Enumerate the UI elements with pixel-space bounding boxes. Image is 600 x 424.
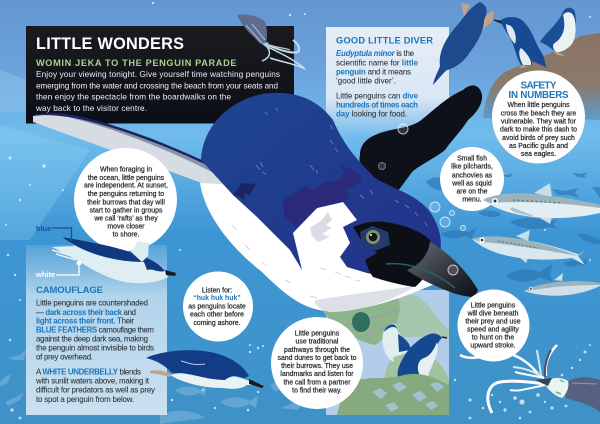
fish 1 [483,183,600,224]
belly feather marks [232,225,360,298]
circle: listen for: “huk huk huk” [193,295,241,302]
icon: fish group [472,183,600,296]
penguin: countershading diagram [52,237,176,283]
panel: camouflage [26,245,167,415]
label: white: white [35,270,55,279]
text: scientific name: Eudyptula minor is the [336,49,415,58]
icon: squid top [237,14,305,69]
intro text: Enjoy your viewing tonight. Give yourself time watching penguins [36,70,280,79]
text: scientific name: penguin and it means [336,68,411,76]
text: countershading: Little penguins are countershaded [36,299,148,308]
text: countershading: against the deep dark sea, making [36,335,148,344]
bubbles [378,124,466,275]
icon: diving penguin [433,2,494,85]
dark flank pattern [283,166,362,228]
text: dive hundreds: day looking for food. [336,110,407,119]
circle: listen for: each other before [190,312,244,319]
intro text: then enjoy the spectacle from the boardwalks on the [36,92,231,102]
circle: foraging: the penguins returning to [88,191,164,198]
circle: listen for: coming ashore. [193,320,241,327]
circle: safety in numbers: IN NUMBERS [508,90,569,101]
background fish silhouettes [426,172,600,282]
circle: dive beneath: will dive beneath [467,311,519,318]
circle: traditional pathways: use traditional [296,339,339,346]
text: white underbelly: with sunlit waters above, making it [35,377,150,386]
label: blue: blue [36,224,51,233]
intro text [35,70,280,113]
icon: penguins on rock [494,8,576,68]
black head mask [353,222,432,287]
circle: safety in numbers: avoid birds of prey such [502,135,575,142]
circle: traditional pathways: Little penguins [295,331,340,338]
penguin back [540,8,576,56]
circle: foraging: we call ‘rafts’ as they [93,215,158,222]
nest burrow [322,292,400,345]
circle: small fish [440,147,504,211]
text: scientific name: scientific name for little [336,58,419,68]
circle: traditional pathways [271,317,363,409]
circle: small fish: well as squid [451,181,492,188]
circle: small fish: anchovies as [452,172,493,179]
circle: safety in numbers: sea eagles. [521,151,556,158]
eye [360,226,390,251]
beak [407,242,478,297]
heading: little wonders: LITTLE WONDERS [36,35,184,53]
text: countershading: — dark across their back and [36,308,136,317]
circle: dive beneath: upward stroke. [470,343,516,350]
subheading: womin jeka: WOMIN JEKA TO THE PENGUIN PARADE [36,58,236,68]
circle: safety in numbers: When little penguins [507,102,570,109]
circle: safety in numbers [492,70,585,164]
panel: burrow scene [322,290,449,415]
circle: safety in numbers: as Pacific gulls and [509,143,568,150]
text: white underbelly [35,368,155,404]
left flipper [33,113,245,196]
right flipper [359,85,482,202]
text: dive hundreds: Little penguins can dive [336,92,419,100]
circle: foraging [74,148,177,251]
text: scientific name: ‘good little diver’. [336,76,396,86]
label: blue [36,224,72,241]
circle: safety in numbers: SAFETY [520,80,557,92]
circle: small fish: menu. [462,196,482,203]
circle: dive beneath: speed and agility [467,327,519,334]
penguin: bottom swimming [146,350,264,389]
text: scientific name [336,49,419,86]
circle: foraging: start to gather in groups [90,207,163,214]
circle: safety in numbers: cross the beach they are [501,110,576,117]
circle: foraging: to shore. [113,232,139,239]
text: countershading: of prey overhead. [36,353,93,362]
circle: traditional pathways: sand dunes to get back to [278,355,357,362]
rock [483,33,600,120]
text: dive hundreds: hundreds of times each [336,101,418,110]
circle: small fish: like pilchards, [451,164,493,171]
circle: listen for: Listen for: [202,287,232,294]
circle: dive beneath: their prey and use [465,319,521,326]
blue back [201,93,441,280]
panel: good little diver [326,27,449,137]
feather marks [256,108,427,226]
circle: foraging: are independent. At sunset, [84,183,168,190]
circle: small fish: Small fish [457,156,487,163]
circle: safety in numbers: vulnerable. They wait for [501,118,577,125]
text: countershading: the penguin almost invisible to birds [36,344,154,353]
circle: listen for: as penguins locate [188,303,246,310]
fish 3 [524,273,600,296]
circle: small fish: are on the [456,189,488,196]
mouth line [386,264,455,288]
circle: listen for [183,272,253,342]
circle: traditional pathways: to find their way. [292,387,342,394]
circle: dive beneath [458,290,530,362]
penguin front [494,17,548,68]
circle: foraging: When foraging in [100,167,152,174]
circle: dive beneath: Little penguins [471,303,516,310]
white belly [200,183,445,311]
text: countershading [36,299,154,362]
circle: safety in numbers: dark to make this dash to [500,127,577,134]
circle: traditional pathways: their burrows. They use [281,363,353,370]
circle: traditional pathways: the call from a partner [283,379,351,386]
intro text: emerging from the water and crossing the beach from your seats and [36,82,278,90]
circle: foraging: the ocean, little penguins [88,175,165,182]
text: dive hundreds [336,92,419,119]
flipper base [233,183,256,200]
circle: traditional pathways: landmarks and listen for [280,371,354,378]
heading: camouflage: CAMOUFLAGE [36,285,103,296]
intro text: way back to the visitor centre. [35,104,147,113]
penguins in burrow scene [382,324,447,377]
shrubs [337,374,449,415]
circle: foraging: their burrows that day will [87,199,165,206]
circle: dive beneath: to hunt on the [472,335,514,342]
circle: traditional pathways: pathways through the [284,347,350,354]
panel: title [26,26,294,124]
label: white [35,260,82,279]
circle: foraging: move closer [107,223,145,230]
text: countershading: light across their front. Their [36,317,134,326]
heading: good little diver: GOOD LITTLE DIVER [336,36,433,46]
text: countershading: BLUE FEATHERS camouflage them [36,326,154,335]
text: white underbelly: A WHITE UNDERBELLY blends [36,368,141,377]
icon: squid bottom right [460,345,600,413]
text: white underbelly: to spot a penguin from below. [36,395,134,404]
fish 2 [472,230,586,265]
cheek feathers [310,212,332,242]
belly shadow [315,286,415,312]
main penguin [33,85,482,312]
text: white underbelly: difficult for predators as well as prey [36,386,155,395]
